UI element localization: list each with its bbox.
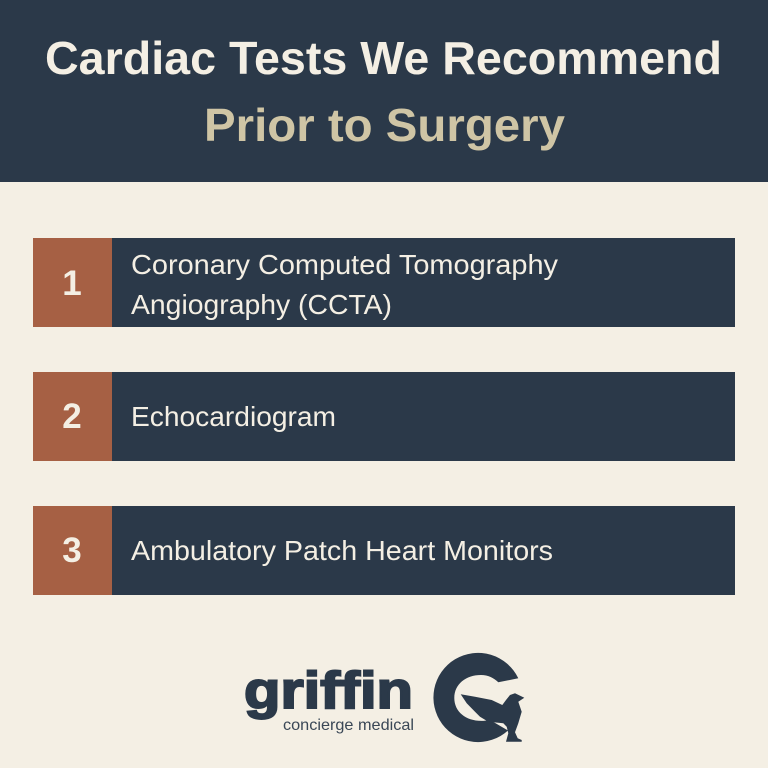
item 1 label: Coronary Computed Tomography [131, 249, 558, 280]
item 1 label [131, 249, 558, 320]
number badge 2: 2 [62, 397, 82, 436]
item 1 label: Angiography (CCTA) [131, 289, 392, 320]
item 2 label: Echocardiogram [131, 401, 336, 432]
list item 3 [33, 506, 735, 595]
list item 2 [33, 372, 735, 461]
number badge 3: 3 [62, 531, 82, 570]
logo wordmark: griffin [244, 662, 413, 720]
griffin logo [244, 653, 524, 742]
title line 1: Cardiac Tests We Recommend [45, 32, 722, 84]
number badge 2 [33, 372, 112, 461]
title line 2: Prior to Surgery [204, 99, 565, 151]
number badge 3 [33, 506, 112, 595]
list item 1 [33, 238, 735, 327]
item 3 label: Ambulatory Patch Heart Monitors [131, 535, 553, 566]
logo tagline: concierge medical [283, 717, 414, 734]
icon: griffin G emblem [433, 653, 524, 742]
number badge 1 [33, 238, 112, 327]
header banner [0, 0, 768, 182]
number badge 1: 1 [62, 264, 82, 303]
